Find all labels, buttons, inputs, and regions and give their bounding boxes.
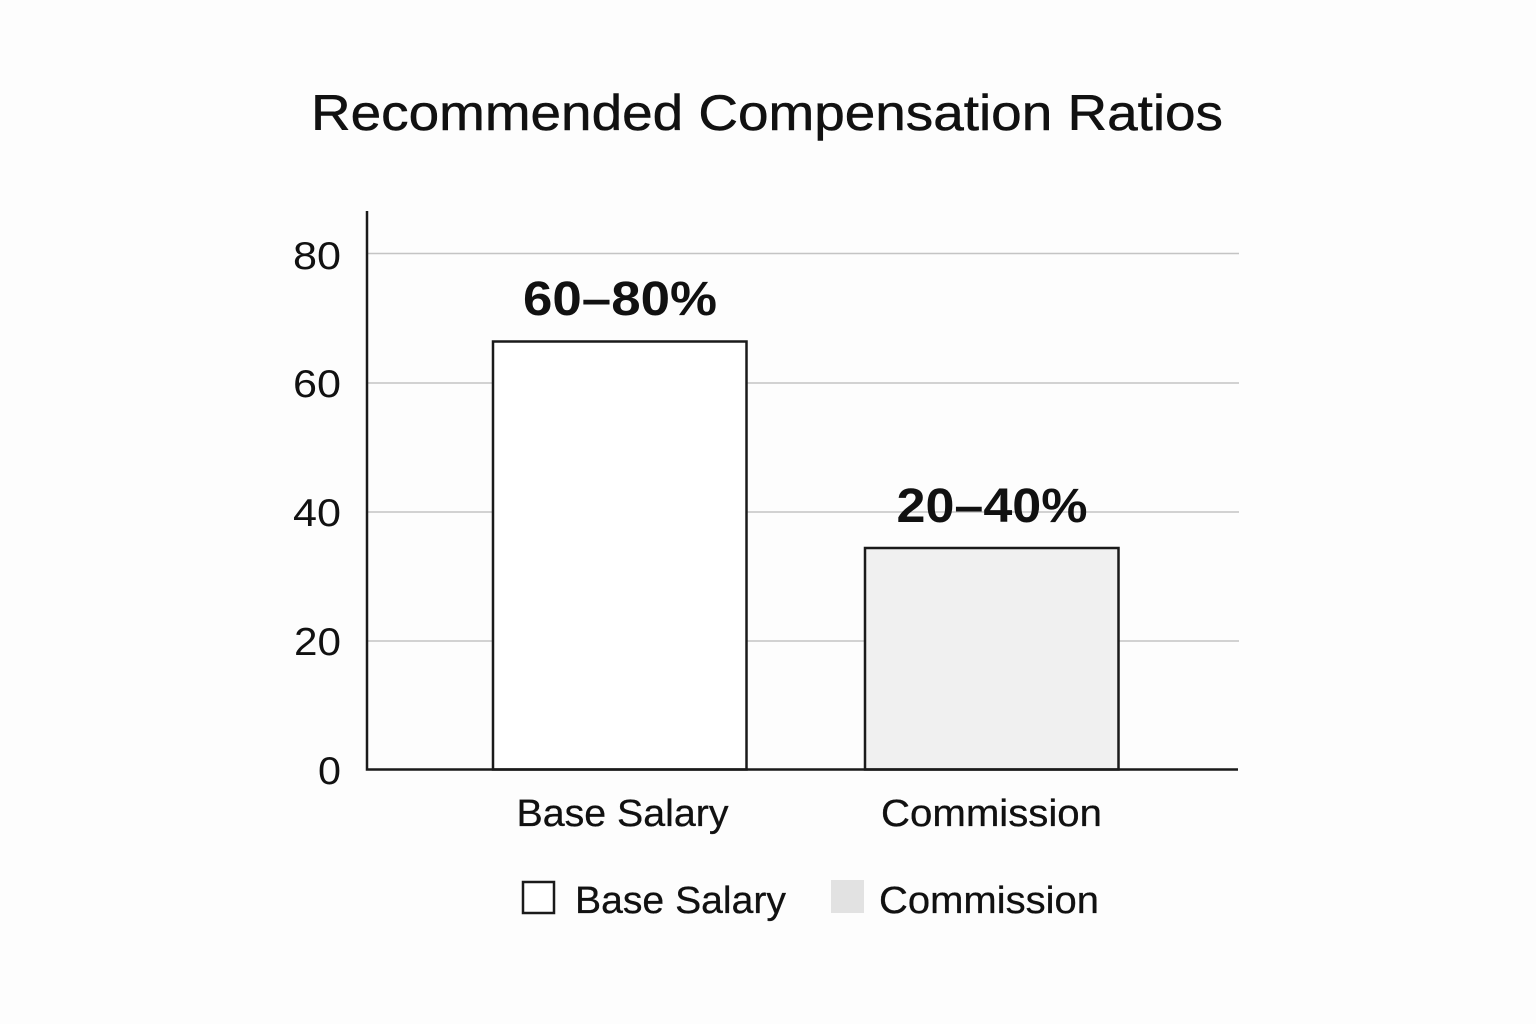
legend swatch: base salary: [523, 882, 554, 913]
value label: commission: 20–40%: [896, 480, 1088, 533]
legend label: commission: Commission: [879, 880, 1099, 922]
legend: [523, 880, 1099, 922]
gridlines: [367, 254, 1239, 641]
y axis labels: [293, 235, 341, 793]
axes: [367, 211, 1238, 770]
legend label: base salary: Base Salary: [575, 880, 786, 922]
y axis labels: 40: [293, 492, 341, 535]
bar: base salary: [493, 342, 746, 770]
bar: commission: [865, 548, 1118, 770]
x axis label: commission: Commission: [881, 793, 1102, 835]
y axis labels: 0: [318, 750, 341, 793]
title: Recommended Compensation Ratios: [311, 85, 1223, 141]
y axis labels: 20: [294, 621, 341, 664]
x axis label: base salary: Base Salary: [516, 793, 728, 835]
y axis labels: 60: [293, 363, 341, 406]
legend swatch: commission: [831, 880, 864, 913]
y axis labels: 80: [293, 235, 341, 278]
value label: base salary: 60–80%: [523, 273, 717, 326]
